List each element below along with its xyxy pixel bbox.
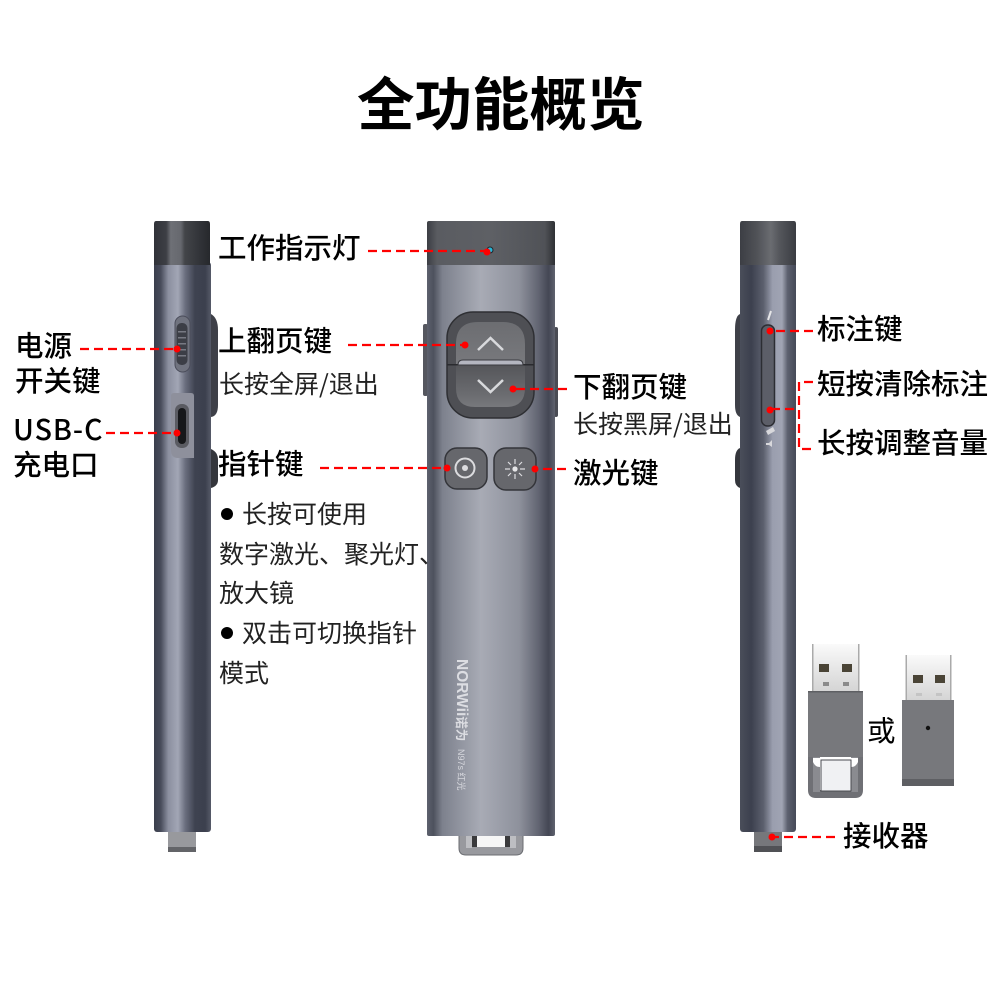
side rocker: left pen <box>211 314 218 417</box>
leader: 工作指示灯 <box>368 248 490 256</box>
label: 长按调整音量: 长按调整音量 <box>817 421 988 462</box>
body: right pen <box>740 262 796 832</box>
power switch <box>175 316 190 372</box>
note: 长按全屏: 长按全屏/退出 <box>219 365 379 401</box>
Type-C body <box>808 691 863 798</box>
leader: 下翻页键 <box>510 386 567 392</box>
label: USB-C 充电口 <box>13 408 104 484</box>
cap: center pen <box>427 221 555 265</box>
icon: pen mark <box>768 311 771 320</box>
Type-C plug <box>821 760 851 791</box>
side arms <box>813 757 858 792</box>
clip: right pen <box>754 830 782 852</box>
pointer key <box>445 448 487 489</box>
USB-C port <box>171 393 194 458</box>
receiver clip: center pen <box>459 830 523 855</box>
status LED <box>487 247 493 253</box>
label: 标注键: 标注键 <box>817 307 903 348</box>
USB metal plug <box>812 644 860 692</box>
laser key <box>494 448 536 490</box>
dongle metal plug <box>906 655 952 701</box>
icon: up chevron <box>478 338 503 350</box>
label: 短按清除标注: 短按清除标注 <box>817 362 988 403</box>
dongle lip <box>902 779 954 786</box>
pointer key notes: 模式 <box>219 654 269 690</box>
icon: down chevron <box>478 380 503 392</box>
logo: NORWii: NORWii 诺为 <box>453 659 470 741</box>
pointer key notes <box>219 495 444 690</box>
label: 工作指示灯: 工作指示灯 <box>218 226 361 267</box>
receiver: USB + Type-C <box>808 644 863 798</box>
label: 电源开关键: 开关键 <box>15 359 101 400</box>
center pen <box>423 221 558 855</box>
model text: N97s 红光 <box>456 749 467 791</box>
pointer key notes: 长按可使用 <box>242 495 367 531</box>
pointer key notes: 数字激光、聚光灯、 <box>219 535 444 571</box>
label: USB-C 充电口: USB-C <box>13 408 104 449</box>
leader: 指针键 <box>320 464 450 472</box>
title: 全功能概览 <box>357 58 644 142</box>
right side bump: center pen <box>554 327 558 417</box>
body: left pen <box>154 262 211 832</box>
leader: 接收器 <box>768 834 835 840</box>
cap: left pen <box>154 221 210 265</box>
left side pen <box>154 221 218 852</box>
leader: 上翻页键 <box>348 342 468 348</box>
frame <box>808 735 863 798</box>
right side pen <box>735 221 796 852</box>
clip: left pen <box>168 830 196 852</box>
label: 接收器: 接收器 <box>843 814 929 855</box>
label: 下翻页键: 下翻页键 <box>573 365 687 406</box>
arm notches <box>813 758 858 767</box>
pointer key side: left pen <box>211 449 218 488</box>
icon: volume mark <box>766 427 775 447</box>
annotation volume key <box>762 325 774 426</box>
hinge block <box>808 691 863 757</box>
cap: right pen <box>740 221 796 265</box>
label: 指针键: 指针键 <box>218 442 304 483</box>
label: 电源开关键 <box>15 324 101 400</box>
label: 激光键: 激光键 <box>573 451 659 492</box>
receiver: USB dongle <box>902 655 954 786</box>
dongle body <box>902 700 954 786</box>
body: center pen <box>427 262 555 836</box>
pointer key notes: 放大镜 <box>219 574 294 610</box>
page keys <box>447 312 534 418</box>
side key: right pen <box>735 448 740 488</box>
label: USB-C 充电口: 充电口 <box>13 443 99 484</box>
leader: 激光键 <box>532 466 566 472</box>
label: 电源开关键: 电源 <box>15 324 72 365</box>
left side bump: center pen <box>423 324 428 396</box>
leader: 标注键 <box>766 328 813 334</box>
dongle LED <box>926 726 930 730</box>
leader: 电源开关键 <box>80 346 180 352</box>
pointer key notes: 双击可切换指针 <box>242 614 417 650</box>
leader: 音量 bracket <box>766 382 813 449</box>
rocker side: right pen <box>735 314 740 417</box>
leader: USB-C <box>106 430 180 436</box>
label: 或: 或 <box>867 709 896 750</box>
note: 长按黑屏: 长按黑屏/退出 <box>573 405 733 441</box>
label: 上翻页键: 上翻页键 <box>218 319 332 360</box>
